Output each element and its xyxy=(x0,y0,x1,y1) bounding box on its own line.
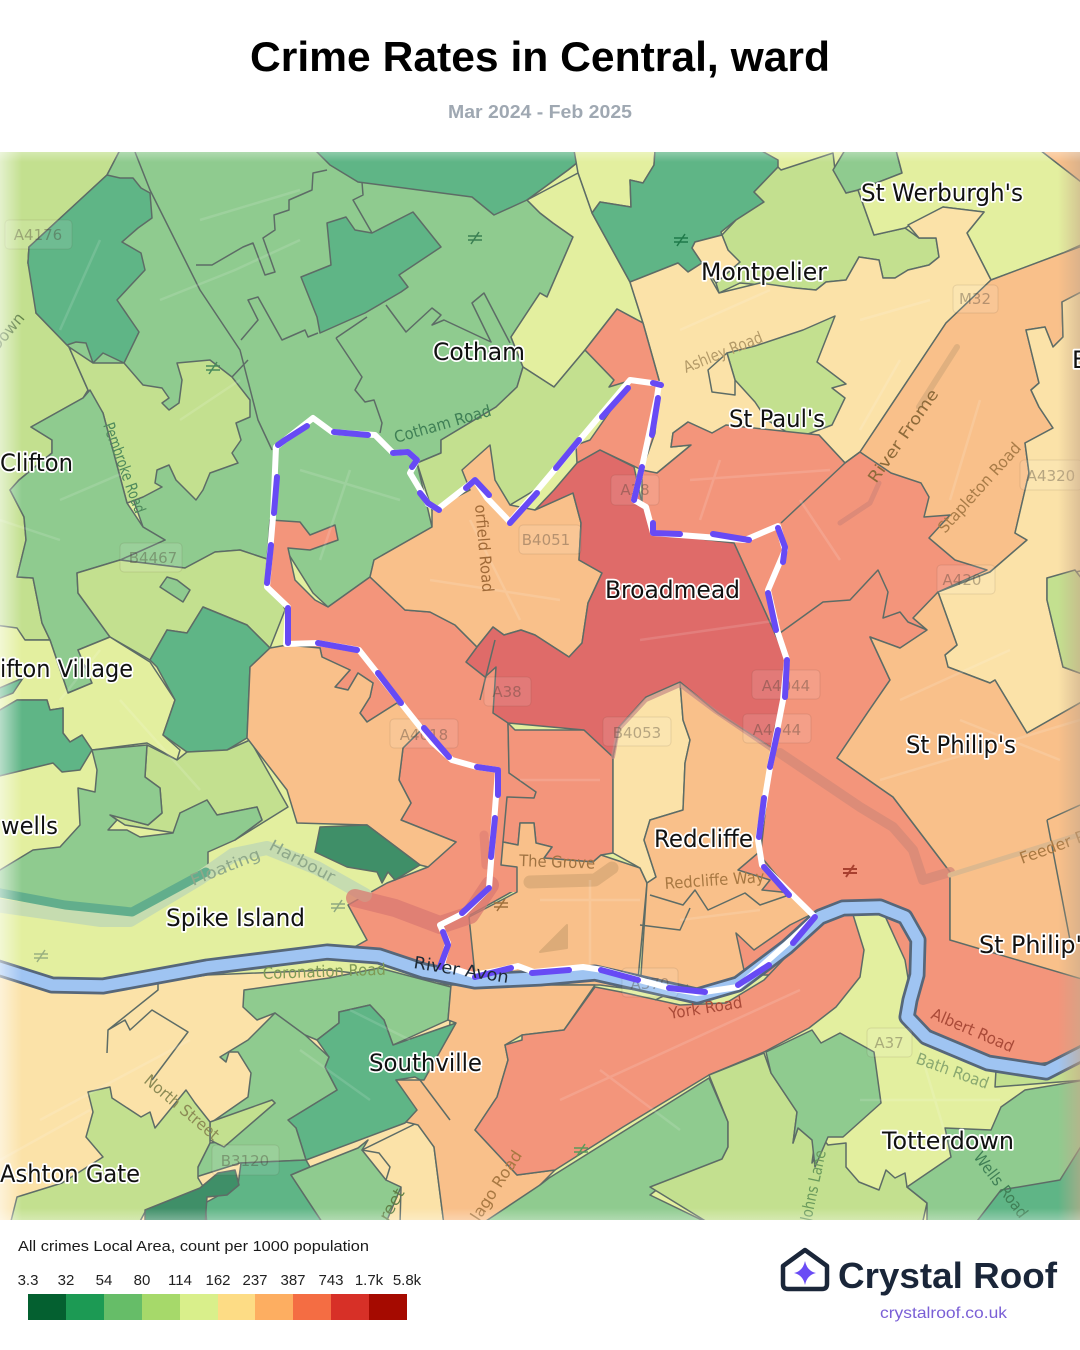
road shields xyxy=(5,220,1080,1175)
road label: Stapleton Road: Stapleton Road xyxy=(934,439,1025,537)
salmon south, York Road xyxy=(475,905,864,1175)
legend values: 32 xyxy=(58,1272,74,1289)
place label: Clifton: Clifton xyxy=(0,449,73,477)
harbour around Broadmead xyxy=(613,685,772,757)
triangle dock xyxy=(540,925,567,952)
shield B4053: B4053 xyxy=(613,724,661,742)
station icon Redland xyxy=(468,232,482,244)
mid green Southville north xyxy=(243,968,451,1045)
choropleth map xyxy=(0,150,1080,1225)
legend values: 80 xyxy=(134,1272,150,1289)
place label: Spike Island: Spike Island xyxy=(166,904,305,932)
orange east district, River Frome xyxy=(845,245,1080,592)
shield A370: A370 xyxy=(631,975,669,993)
place label: St Werburgh's: St Werburgh's xyxy=(861,179,1023,207)
shield A38 south: A38 xyxy=(492,683,522,701)
pale strip Cotham east xyxy=(511,173,643,387)
icon: house with star xyxy=(783,1250,827,1289)
legend heading: All crimes Local Area, count per 1000 population xyxy=(18,1239,369,1255)
orange south centre xyxy=(396,985,595,1225)
road label: River Frome: River Frome xyxy=(864,385,942,486)
place label: St Paul's: St Paul's xyxy=(729,405,825,433)
road label: Redcliffe Way: Redcliffe Way xyxy=(664,867,765,893)
road label: Johns Lane: Johns Lane xyxy=(796,1148,830,1224)
shield A4044 lower: A4044 xyxy=(753,721,801,739)
harbour through salmon district xyxy=(355,885,490,925)
dark green district Montpelier north xyxy=(592,150,778,282)
darkest green south west xyxy=(145,1170,239,1225)
legend values: 3.3 xyxy=(18,1272,38,1289)
shield A420 xyxy=(937,565,995,594)
ward boundary: Central xyxy=(267,380,815,993)
harbour edge through Temple xyxy=(484,835,486,865)
legend values: 237 xyxy=(242,1272,268,1289)
road label: Wells Road: Wells Road xyxy=(970,1148,1032,1222)
light green Ashton xyxy=(10,1087,210,1225)
road label: York Road: York Road xyxy=(667,993,744,1023)
salmon wedge Redcliffe Way xyxy=(738,853,791,893)
River Frome strip through salmon xyxy=(840,483,879,523)
mid green south east xyxy=(907,1080,1080,1225)
shield A370 xyxy=(622,968,678,997)
shield A38 south xyxy=(484,677,531,706)
shield A4044 lower xyxy=(743,714,811,743)
mid green pocket B4467 xyxy=(160,577,190,602)
place labels xyxy=(0,179,1080,1188)
road label: Pembroke Road: Pembroke Road xyxy=(99,420,150,516)
south bank yellow xyxy=(0,970,451,1225)
station icon Grove xyxy=(494,899,508,911)
place label: Cotham: Cotham xyxy=(433,338,525,366)
road label: The Grove: The Grove xyxy=(518,851,595,873)
mid green Clifton column xyxy=(10,390,165,693)
harbour through Hotwells xyxy=(0,872,206,912)
legend values: 743 xyxy=(318,1272,344,1289)
dark green Clifton lower xyxy=(0,700,92,777)
harbour through The Grove xyxy=(530,868,612,882)
place label: Clifton Village: ifton Village xyxy=(0,655,133,683)
yellow nub Montpelier xyxy=(692,235,740,283)
far left light areas xyxy=(0,150,120,640)
shield A37 xyxy=(867,1028,912,1057)
light green lower xyxy=(110,740,288,840)
road label: River Avon: River Avon xyxy=(412,953,510,988)
shield A4044 upper: A4044 xyxy=(762,677,810,695)
shield M32: M32 xyxy=(959,290,991,308)
road label: Street: reet xyxy=(375,1185,408,1224)
light green district around B4467 xyxy=(77,550,285,660)
main mid-green districts, Cotham and north xyxy=(28,150,578,607)
River Avon xyxy=(0,907,1080,1072)
station icon Temple Meads xyxy=(843,865,857,877)
station icon west xyxy=(34,950,48,962)
station icon Montpelier xyxy=(674,234,688,246)
mid green Bedminster xyxy=(196,1013,337,1177)
orange district north centre xyxy=(370,445,602,657)
shield A38 north xyxy=(611,475,659,505)
dark green pocket west edge xyxy=(0,678,23,700)
salmon west xyxy=(265,520,515,975)
legend values: 1.7k xyxy=(355,1272,384,1289)
legend values xyxy=(18,1272,422,1289)
shield A4018: A4018 xyxy=(400,726,448,744)
road label: Floating: Floating xyxy=(187,844,263,890)
pale St Werburgh's xyxy=(858,150,1080,280)
legend values: 5.8k xyxy=(393,1272,422,1289)
shield A4320: A4320 xyxy=(1027,467,1075,485)
pale pocket St Paul's xyxy=(727,316,846,437)
red Broadmead xyxy=(466,450,787,757)
railway strip east xyxy=(780,753,950,880)
shield A420: A420 xyxy=(943,571,981,589)
orange road pocket xyxy=(708,353,735,395)
floating harbour xyxy=(0,848,365,920)
place label: Redcliffe: Redcliffe xyxy=(654,825,753,853)
salmon east, Temple Meads and St Paul's xyxy=(642,422,1080,1070)
orange Brandon Hill district xyxy=(247,645,456,867)
road label: North Street: North Street xyxy=(140,1071,223,1144)
dark green south east corner xyxy=(974,1140,1080,1225)
mid green top right xyxy=(833,150,902,193)
map edge fade xyxy=(0,152,1080,1220)
road label: Bath Road: Bath Road xyxy=(914,1049,992,1093)
legend values: 162 xyxy=(205,1272,231,1289)
shield A4018 xyxy=(390,719,458,748)
shield B3120: B3120 xyxy=(221,1152,269,1170)
darkest green Harbourside xyxy=(315,825,420,883)
light green Pembroke district xyxy=(69,347,250,503)
road labels xyxy=(0,309,1080,1224)
top pale strip xyxy=(574,150,655,213)
legend colour scale xyxy=(28,1294,407,1320)
road label: Coronation Road: Coronation Road xyxy=(262,960,386,983)
salmon Temple block xyxy=(503,723,613,862)
harbour and railway shading xyxy=(0,347,1080,952)
dark green Bedminster south xyxy=(205,1160,324,1225)
orange The Grove xyxy=(469,823,647,990)
station icon south xyxy=(574,1144,588,1156)
shield M32 xyxy=(953,285,998,313)
shield B4467 xyxy=(120,543,182,572)
dark green Southville xyxy=(288,1005,456,1160)
salmon infill west of Temple xyxy=(497,774,536,892)
legend values: 387 xyxy=(280,1272,306,1289)
place label: Ashton Gate: Ashton Gate xyxy=(0,1160,140,1188)
subtitle: date range: Mar 2024 - Feb 2025 xyxy=(448,101,632,122)
shield A38 north: A38 xyxy=(620,481,650,499)
road label: Malago Road: lago Road xyxy=(466,1147,526,1224)
shield B4467: B4467 xyxy=(129,549,177,567)
yellow Windmill Hill xyxy=(362,1123,444,1225)
logo: Crystal Roof xyxy=(783,1250,1058,1322)
salmon wedge north of ward xyxy=(576,309,659,470)
road label: Albert Road: Albert Road xyxy=(928,1004,1017,1056)
road label: Harbour: Harbour xyxy=(266,836,339,887)
station icon Spike Island xyxy=(331,900,345,912)
light green north east xyxy=(716,153,939,293)
light green Cotham Road district xyxy=(417,350,632,510)
district boundary lines xyxy=(107,152,1080,1120)
place label: Broadmead: Broadmead xyxy=(605,576,740,604)
shield A4320 xyxy=(1020,460,1080,490)
station icon Clifton Down xyxy=(206,362,220,374)
logo wordmark: Crystal Roof xyxy=(838,1255,1058,1296)
road label: Ashley Road: Ashley Road xyxy=(680,328,765,377)
road label: Cotham Road: Cotham Road xyxy=(392,401,493,447)
yellow Redcliffe strip xyxy=(613,682,690,883)
mid green Windmill Hill west xyxy=(291,1140,401,1225)
shield A4044 upper xyxy=(752,670,820,699)
dark green district centre left xyxy=(150,607,270,752)
mid green Victoria Park xyxy=(766,1030,881,1167)
place label: Hotwells: wells xyxy=(1,812,58,840)
purple dashes xyxy=(267,383,815,992)
place label: St Philip's: St Philip's xyxy=(906,731,1016,759)
orange St Philip's xyxy=(837,592,1080,980)
dark green district top xyxy=(315,150,578,215)
light green east pocket xyxy=(1047,570,1080,675)
shield B4051: B4051 xyxy=(522,531,570,549)
dark green district centre north xyxy=(301,212,441,333)
River Frome strip xyxy=(919,347,957,407)
shield A4176: A4176 xyxy=(14,226,62,244)
shield A4176 xyxy=(5,220,72,249)
corner orange xyxy=(1042,152,1080,182)
shield B4051 xyxy=(519,525,581,554)
legend values: 54 xyxy=(96,1272,112,1289)
mid green south xyxy=(480,1078,728,1225)
yellow east pocket xyxy=(938,290,1080,733)
mid green Hotwells xyxy=(0,745,262,912)
shield B4053 xyxy=(603,717,671,746)
title: Crime Rates in Central, ward xyxy=(250,33,830,80)
place label: Totterdown: Totterdown xyxy=(881,1127,1014,1155)
place label: Southville: Southville xyxy=(369,1049,482,1077)
light green Johns Lane xyxy=(650,1053,927,1225)
rail station icons xyxy=(34,232,857,1156)
place label: St Philip's lower: St Philip' xyxy=(979,931,1080,959)
yellow Montpelier xyxy=(630,207,991,478)
faint street network xyxy=(0,190,1080,1160)
orange Redcliffe xyxy=(640,682,815,995)
light strip Bedminster xyxy=(210,1100,275,1147)
legend values: 114 xyxy=(168,1272,192,1289)
light strip Bath Road xyxy=(995,1057,1080,1087)
road label: Norfield Road: orfield Road xyxy=(471,504,498,593)
shield A37: A37 xyxy=(874,1034,904,1052)
feeder canal xyxy=(950,833,1080,875)
shield B3120 xyxy=(212,1145,279,1175)
dark green district west xyxy=(28,175,152,363)
place label: Montpelier: Montpelier xyxy=(701,258,827,286)
pale Clifton Village xyxy=(0,625,180,760)
white boundary line xyxy=(267,380,815,993)
salmon wedge Clarence Road xyxy=(736,915,810,975)
logo url: crystalroof.co.uk xyxy=(880,1305,1008,1322)
